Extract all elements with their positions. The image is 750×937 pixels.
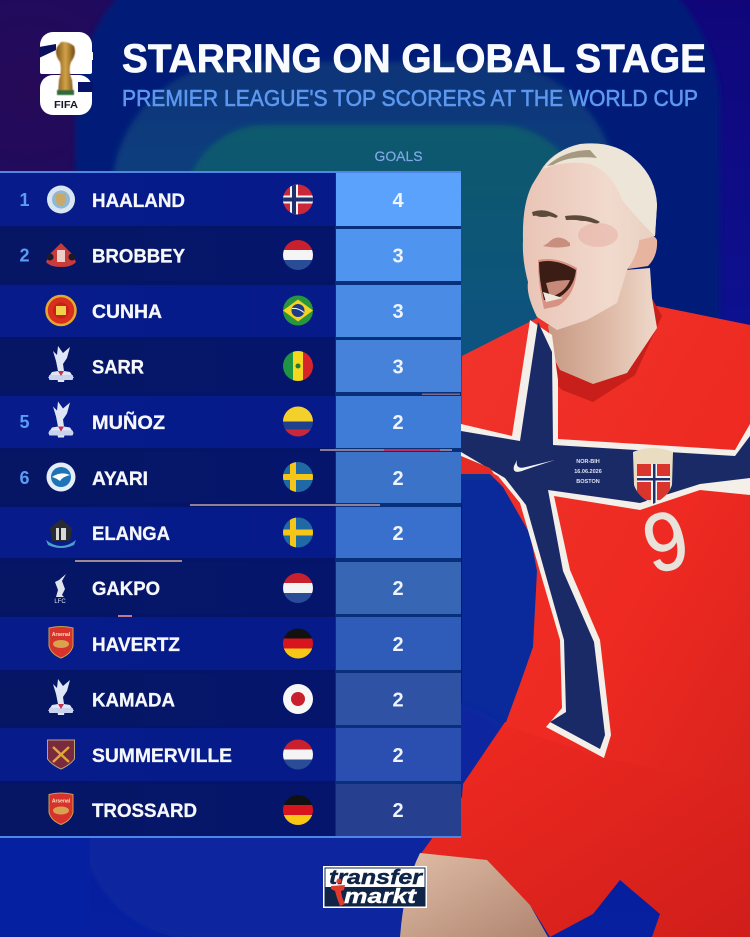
FIFA wordmark: FIFA	[54, 99, 78, 111]
row: Haaland: 1	[19, 190, 30, 210]
crest: Arsenal	[49, 793, 73, 824]
flag: Brazil	[283, 296, 313, 326]
table backing	[0, 173, 461, 836]
flag: Norway	[283, 184, 313, 214]
row: Ayari: AYARI	[92, 468, 148, 490]
row: Haaland: 4	[392, 190, 404, 212]
mouth	[538, 259, 577, 309]
flag: Germany	[283, 795, 313, 825]
crest: West Ham	[48, 740, 74, 769]
flag: Japan	[283, 684, 313, 714]
image glitch streaks	[75, 394, 460, 617]
match details: NOR-BIH	[576, 459, 600, 465]
row: Gakpo: GAKPO	[92, 578, 160, 600]
footballer icon	[331, 878, 345, 906]
logo: FIFA World Cup 26	[39, 32, 93, 115]
ear	[628, 235, 657, 269]
crest: Arsenal: Arsenal	[52, 632, 71, 638]
flag: Netherlands	[283, 240, 313, 270]
flag: Senegal	[283, 351, 313, 381]
crest: Liverpool	[54, 574, 66, 605]
crest: Newcastle	[46, 519, 76, 548]
crest: Norway	[633, 448, 673, 504]
shorts	[420, 722, 750, 937]
row: Elanga: ELANGA	[92, 523, 170, 545]
row: Summerville: 2	[392, 745, 404, 767]
row: Sarr: 3	[392, 356, 404, 378]
flag: Sweden	[283, 518, 313, 548]
row: Summerville: SUMMERVILLE	[92, 745, 232, 767]
row: Trossard	[0, 784, 461, 836]
flag: Colombia	[283, 406, 313, 436]
table top rule	[0, 171, 461, 173]
row: Trossard: TROSSARD	[92, 800, 197, 822]
row: Muñoz: 2	[392, 412, 404, 434]
wordmark: transfer: transfer	[329, 867, 424, 889]
row: Gakpo: 2	[392, 578, 404, 600]
row: Kamada: 2	[392, 690, 404, 712]
subtitle: PREMIER LEAGUE'S TOP SCORERS AT THE WORLD CUP	[122, 85, 698, 111]
crest: Arsenal: Arsenal	[52, 798, 71, 804]
row: Muñoz: MUÑOZ	[92, 411, 165, 434]
hair	[543, 143, 657, 236]
row: Haaland: HAALAND	[92, 190, 185, 212]
row: Ayari: 6	[19, 468, 30, 488]
cross: white border	[461, 320, 750, 758]
flag: Germany	[283, 628, 313, 658]
sleeve stripe	[461, 456, 494, 474]
row: Havertz	[0, 617, 461, 670]
crest: Crystal Palace	[48, 679, 74, 715]
title: STARRING ON GLOBAL STAGE	[122, 37, 706, 81]
match details: BOSTON	[576, 479, 600, 485]
crest: Crystal Palace	[48, 402, 74, 438]
row: Elanga	[0, 507, 461, 558]
wordmark: markt: markt	[344, 886, 418, 908]
head	[523, 144, 657, 330]
row: Sarr	[48, 340, 461, 392]
crest: Arsenal	[49, 626, 73, 658]
row: Summerville	[0, 728, 461, 781]
row: Havertz: HAVERTZ	[92, 634, 180, 656]
shirt number: 9	[634, 491, 697, 591]
row: Trossard: 2	[392, 800, 404, 822]
match details	[574, 459, 602, 485]
logo numeral 6	[40, 75, 93, 115]
collar	[548, 295, 662, 402]
trophy	[56, 42, 75, 95]
row: Elanga: 2	[392, 523, 404, 545]
brows and eyes	[532, 210, 600, 224]
crest: Sunderland	[46, 243, 76, 267]
row: Cunha: CUNHA	[92, 301, 162, 323]
table bottom rule	[0, 836, 461, 838]
shirt	[461, 306, 750, 789]
swoosh	[514, 460, 555, 472]
flag: Netherlands	[283, 573, 313, 603]
player: Haaland	[400, 143, 750, 937]
crest: Crystal Palace	[48, 346, 74, 382]
crest: Liverpool: LFC	[54, 599, 66, 605]
row: Sarr: SARR	[92, 356, 144, 378]
row: Brobbey	[0, 229, 461, 281]
row: Muñoz: 5	[19, 412, 30, 432]
table	[0, 171, 461, 838]
cheek shading	[578, 223, 618, 247]
row: Brobbey: 3	[392, 246, 404, 268]
row: Cunha	[0, 285, 461, 337]
crest: Brighton	[46, 462, 76, 492]
row: Cunha: 3	[392, 301, 404, 323]
logo numeral 2	[39, 32, 93, 74]
crest: Manchester United	[46, 296, 76, 325]
logo: Transfermarkt	[323, 866, 427, 908]
neck	[548, 268, 657, 384]
row: Gakpo	[0, 562, 461, 614]
thigh	[400, 853, 548, 937]
row: Brobbey: 2	[19, 246, 30, 266]
nose	[543, 238, 570, 248]
row: Brobbey: BROBBEY	[92, 246, 185, 268]
column heading: goals: GOALS	[374, 148, 422, 164]
row: Haaland	[0, 173, 461, 226]
row: Ayari: 2	[392, 468, 404, 490]
row: Kamada: KAMADA	[92, 690, 175, 712]
row: Ayari	[0, 452, 461, 503]
row: Havertz: 2	[392, 634, 404, 656]
hair streak	[547, 150, 597, 166]
row: Kamada	[0, 673, 461, 725]
flag: Sweden	[283, 462, 313, 492]
match details: 16.06.2026	[574, 469, 602, 475]
crest: Manchester City	[47, 186, 75, 214]
flag: Netherlands	[283, 740, 313, 770]
cross: navy band	[461, 322, 750, 749]
row: Muñoz	[0, 396, 461, 448]
